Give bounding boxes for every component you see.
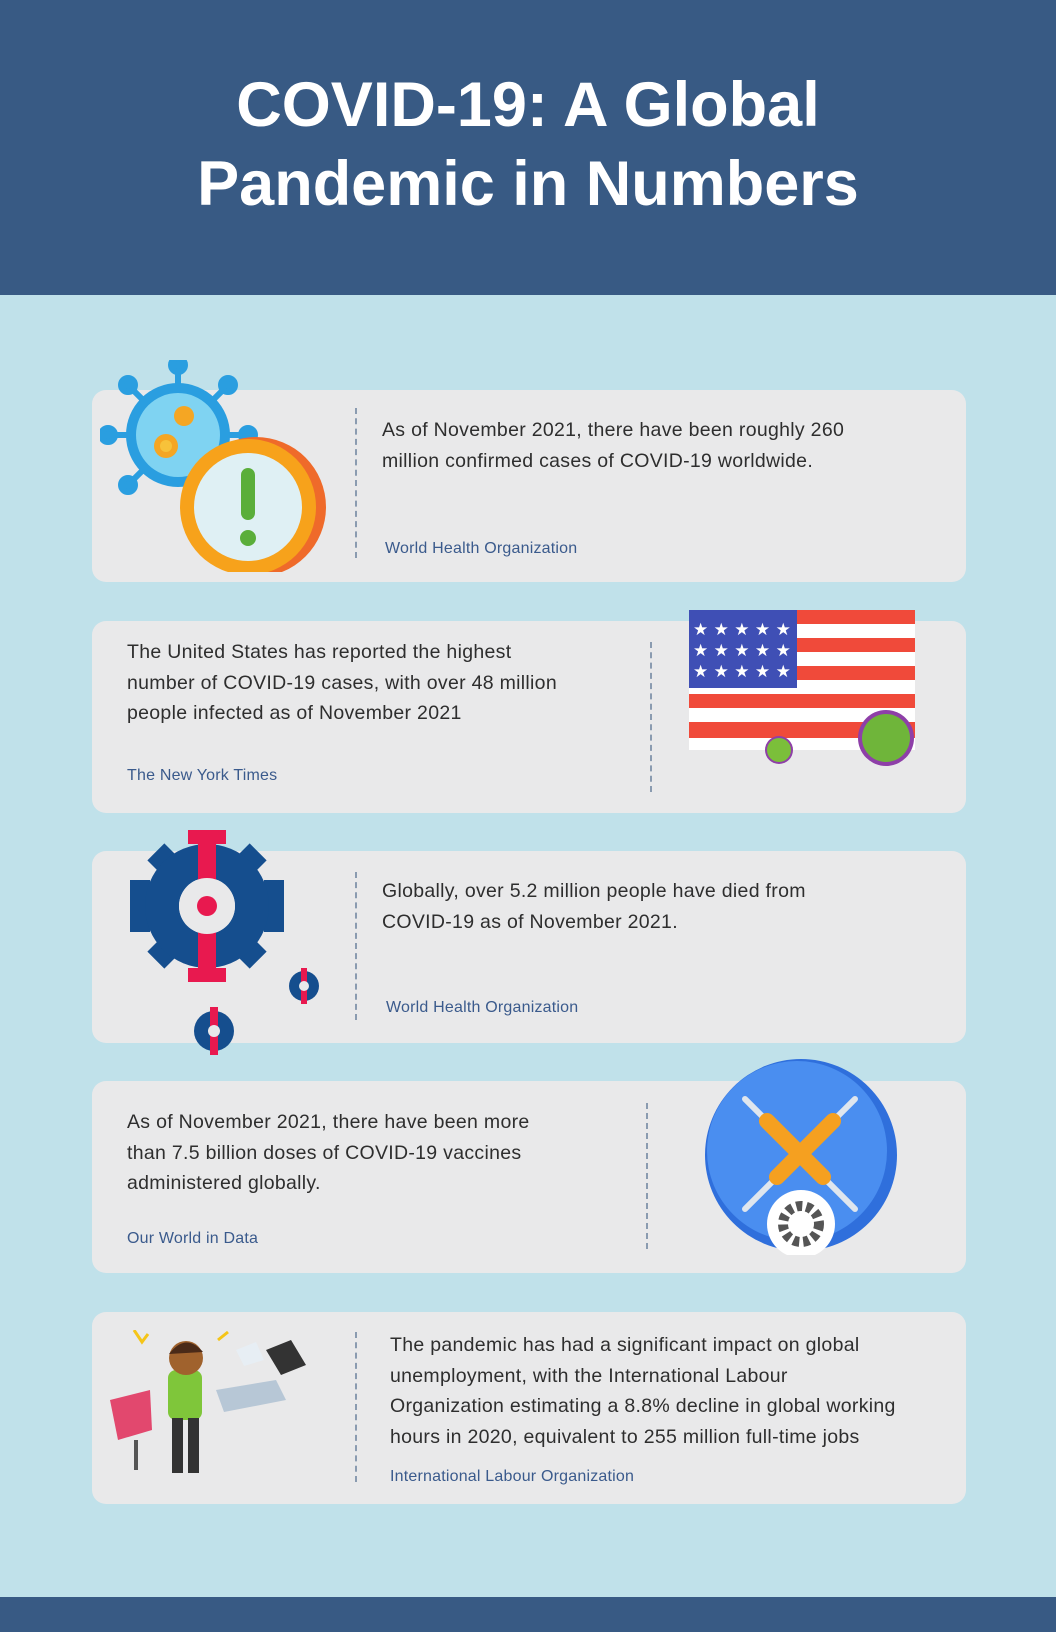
text: vaccines: As of November 2021, there have been more	[127, 1111, 530, 1133]
panel: deaths	[92, 851, 966, 1043]
text: unemployment: unemployment, with the International Labour	[390, 1364, 788, 1386]
text: deaths	[382, 880, 806, 932]
text: cases: As of November 2021, there have been roughly 260	[382, 419, 844, 441]
icon: US flag with virus: ★ ★ ★ ★ ★	[693, 641, 791, 661]
text: cases	[382, 419, 844, 472]
text: deaths: COVID-19 as of November 2021.	[382, 910, 678, 932]
icon: US flag with virus	[689, 610, 915, 766]
panel: confirmed cases	[92, 390, 966, 582]
header	[0, 0, 1056, 295]
text: vaccines	[127, 1111, 530, 1194]
text: unemployment	[390, 1334, 896, 1448]
icon: US flag with virus: ★ ★ ★ ★ ★	[693, 620, 791, 640]
panel: US cases	[92, 621, 966, 813]
footer	[0, 1597, 1056, 1632]
source: World Health Organization	[386, 999, 578, 1016]
source: Our World in Data	[127, 1230, 258, 1247]
title	[197, 70, 859, 219]
source: International Labour Organization	[390, 1468, 634, 1485]
divider	[355, 872, 357, 1020]
divider	[646, 1103, 648, 1249]
text: US: people infected as of November 2021	[127, 702, 462, 724]
title: COVID-19: A Global	[236, 70, 820, 140]
text: vaccines: than 7.5 billion doses of COVID-19 vaccines	[127, 1142, 521, 1164]
divider	[650, 642, 652, 792]
icon: US flag with virus: ★ ★ ★ ★ ★	[693, 662, 791, 682]
text: unemployment: Organization estimating a 8.8% decline in global working	[390, 1395, 896, 1417]
icon: frustrated worker	[110, 1330, 306, 1473]
text: deaths: Globally, over 5.2 million people have died from	[382, 880, 806, 902]
text: cases: million confirmed cases of COVID-19 worldwide.	[382, 450, 813, 472]
source: The New York Times	[127, 767, 277, 784]
text: US: The United States has reported the highest	[127, 641, 511, 663]
text: unemployment: hours in 2020, equivalent to 255 million full-time jobs	[390, 1426, 860, 1448]
icon: virus warning	[100, 360, 326, 572]
text: unemployment: The pandemic has had a significant impact on global	[390, 1334, 860, 1356]
divider	[355, 408, 357, 558]
text: US	[127, 641, 557, 724]
panel: unemployment	[92, 1312, 966, 1504]
divider	[355, 1332, 357, 1482]
icon: virus symbol	[130, 830, 319, 1055]
title: Pandemic in Numbers	[197, 149, 859, 219]
panel: vaccines	[92, 1081, 966, 1273]
text: US: number of COVID-19 cases, with over 48 million	[127, 672, 557, 694]
icon: vaccine syringes	[705, 1059, 897, 1255]
source: World Health Organization	[385, 540, 577, 557]
text: vaccines: administered globally.	[127, 1172, 321, 1194]
